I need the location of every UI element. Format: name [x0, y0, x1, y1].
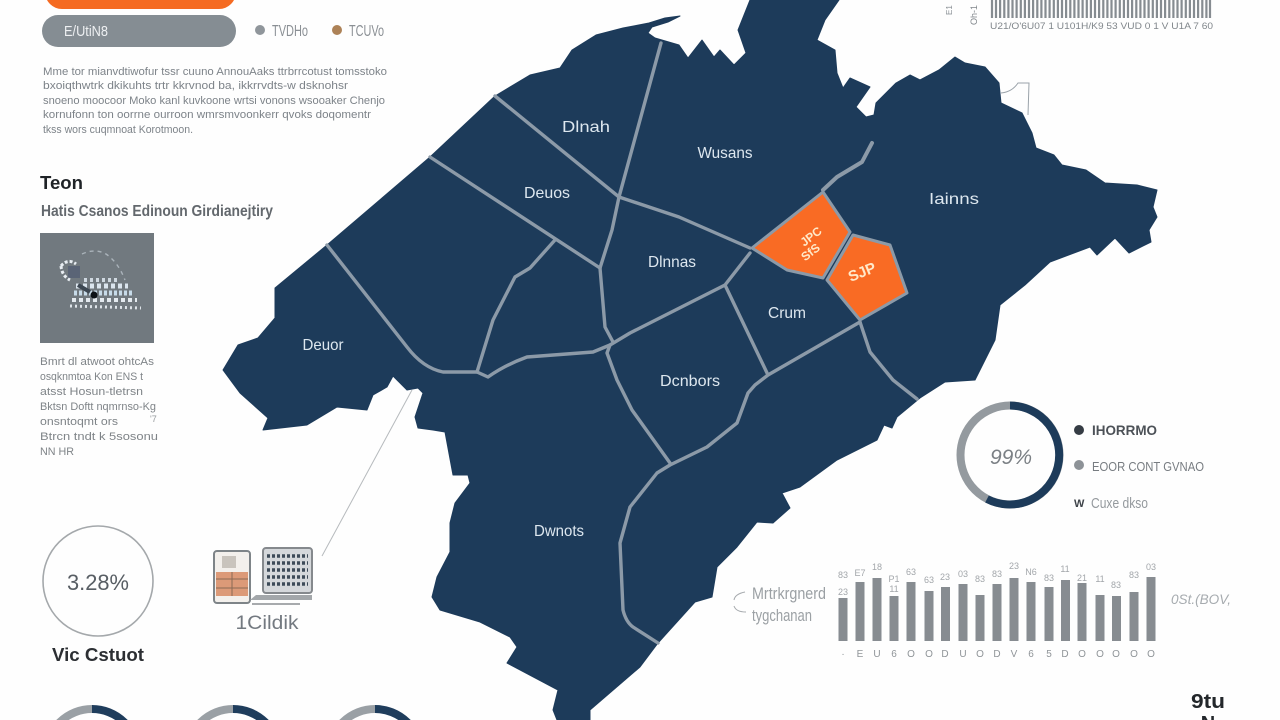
- text block: intro paragraph: bxoiqthwtrk dkikuhts trtr kkrvnod ba, ikkrrvdts-w dsknohsr: [43, 80, 348, 92]
- bar value labels: N6: [1025, 567, 1037, 577]
- bar value labels: 83: [1129, 570, 1139, 580]
- bar axis labels: 6: [891, 649, 897, 660]
- bar value labels: 11: [1060, 564, 1070, 574]
- icon: building blocks: [214, 548, 312, 604]
- bar value labels: 83: [838, 570, 848, 580]
- bar value labels: 21: [1077, 573, 1087, 583]
- bottom donut gauge 1: [46, 709, 138, 720]
- icon label: 1Cildik: [236, 613, 299, 634]
- orange pill button: [45, 0, 236, 9]
- bar axis labels: E: [857, 649, 864, 660]
- orange region label 1: SfS: [798, 241, 823, 264]
- gray pill button: [42, 15, 236, 47]
- text block: intro paragraph: snoeno moocoor Moko kanl kuvkoone wrtsi vonons wsooaker Chenjo: [43, 95, 385, 107]
- legend row 2: EOOR CONT GVNAO: [1092, 459, 1204, 474]
- bar value labels: 83: [975, 574, 985, 584]
- region labels: Dcnbors: [660, 373, 720, 390]
- donut chart: share: [960, 406, 1060, 504]
- bar value labels: 23: [940, 572, 950, 582]
- bar axis labels: D: [941, 649, 949, 660]
- text block: thumbnail caption: osqknmtoa Kon ENS t: [40, 371, 143, 383]
- bar axis labels: O: [1130, 649, 1138, 660]
- gray pill button: E/UtiN8: [64, 23, 108, 40]
- text block: thumbnail caption: [40, 356, 158, 458]
- bar value labels: 03: [958, 569, 968, 579]
- bottom donut gauge 2: [187, 709, 279, 720]
- bar axis labels: 6: [1028, 649, 1034, 660]
- text block: thumbnail caption: Btrcn tndt k 5sosonu: [40, 431, 158, 443]
- barcode axis labels: U21/O'6U07 1 U101H/K9 53 VUD 0 1 V U1A 7 60: [990, 21, 1213, 31]
- donut legend: [1074, 422, 1204, 512]
- region labels: Deuor: [302, 337, 344, 354]
- bar value labels: 83: [992, 569, 1002, 579]
- bar chart: [838, 561, 1156, 660]
- text block: thumbnail caption: Bktsn Doftt nqmrnso-Kg: [40, 401, 156, 413]
- bar value labels: P1: [888, 574, 900, 584]
- text block: thumbnail caption: onsntoqmt ors: [40, 416, 119, 428]
- bar axis labels: O: [1096, 649, 1104, 660]
- bar axis labels: O: [1112, 649, 1120, 660]
- bar chart caption: [734, 584, 826, 625]
- bar axis labels: O: [1078, 649, 1086, 660]
- legend row 3: Cuxe dkso: [1091, 495, 1148, 512]
- bar axis labels: 5: [1046, 649, 1052, 660]
- region labels: Iainns: [929, 191, 979, 208]
- bar chart caption: tygchanan: [752, 606, 812, 625]
- legend row 1: IHORRMO: [1092, 422, 1157, 438]
- bar value labels: 63: [924, 575, 934, 585]
- stat circle: percentage: 3.28%: [67, 570, 129, 595]
- bar axis labels: O: [1147, 649, 1155, 660]
- legend: brown item: [332, 23, 384, 40]
- region labels: Wusans: [698, 145, 752, 162]
- bar axis labels: D: [1061, 649, 1069, 660]
- legend: gray item: TVDHo: [272, 23, 308, 40]
- text block: thumbnail caption: Bmrt dl atwoot ohtcAs: [40, 356, 155, 368]
- legend: gray item: [255, 23, 308, 40]
- donut chart: share: 99%: [990, 446, 1032, 469]
- legend row 3: W: [1074, 498, 1085, 510]
- bar axis labels: D: [993, 649, 1001, 660]
- map landmass: [223, 0, 1157, 720]
- highlighted region: north: [752, 192, 850, 278]
- bar value labels: E7: [854, 568, 866, 578]
- bar axis labels: V: [1011, 649, 1018, 660]
- text block: thumbnail caption: NN HR: [40, 446, 74, 458]
- bar value labels: 83: [1044, 573, 1054, 583]
- callout leader line: [322, 390, 412, 556]
- bar chart side note: 0St.(BOV,: [1171, 591, 1231, 607]
- bar axis labels: U: [873, 649, 881, 660]
- region labels: Crum: [768, 305, 806, 322]
- bar value labels: 03: [1146, 562, 1156, 572]
- bar chart caption: Mrtrkrgnerd: [752, 584, 826, 603]
- bar value labels: 23: [1009, 561, 1019, 571]
- region labels: Dlnah: [562, 119, 610, 136]
- barcode bars: [992, 0, 1210, 18]
- text block: thumbnail caption: '7: [150, 414, 157, 424]
- bottom right figure: 9tu: [1191, 691, 1225, 713]
- region labels: [302, 119, 979, 540]
- vertical labels: E1: [945, 5, 954, 15]
- bottom right figure: [1191, 691, 1225, 720]
- bar axis labels: [841, 649, 1155, 660]
- bar value labels: 83: [1111, 580, 1121, 590]
- text block: intro paragraph: tkss wors cuqmnoat Korotmoon.: [43, 124, 193, 136]
- small vertical label: Oh-1: [969, 5, 979, 25]
- panel: top left header controls: [42, 0, 384, 47]
- region labels: Deuos: [524, 185, 570, 202]
- image panel: small map thumbnail: [40, 233, 154, 343]
- bar value labels: 63: [906, 567, 916, 577]
- bar axis labels: O: [907, 649, 915, 660]
- bar axis labels: ·: [841, 649, 845, 660]
- heading: section title: Teon: [40, 173, 83, 193]
- stat label: Vic Cstuot: [52, 645, 144, 665]
- bottom donut gauge 3: [329, 709, 421, 720]
- text block: intro paragraph: [43, 66, 387, 136]
- bars: [838, 577, 1156, 641]
- legend row 3: [1074, 495, 1148, 512]
- stat circle: percentage: [43, 526, 153, 636]
- map: regions: [223, 0, 1157, 720]
- top right barcode chart: [945, 0, 1213, 31]
- highlighted region: south: [827, 235, 907, 320]
- bar axis labels: O: [976, 649, 984, 660]
- bar value labels: 11: [1095, 574, 1105, 584]
- text block: intro paragraph: Mme tor mianvdtiwofur tssr cuuno AnnouAaks ttrbrrcotust tomsstoko: [43, 66, 387, 78]
- orange region label 1: JPC: [798, 224, 825, 249]
- bar value labels: 11: [889, 584, 899, 594]
- region labels: Dwnots: [534, 523, 584, 540]
- legend: brown item: TCUVo: [349, 23, 384, 40]
- bar axis labels: O: [925, 649, 933, 660]
- bar value labels: [838, 561, 1156, 597]
- thin coastal line: [1001, 83, 1029, 115]
- bar value labels: 18: [872, 562, 882, 572]
- orange region label 2: SJP: [846, 259, 879, 286]
- text block: thumbnail caption: atsst Hosun-tletrsn: [40, 386, 143, 398]
- region labels: Dlnnas: [648, 254, 696, 271]
- bar axis labels: U: [959, 649, 967, 660]
- bar value labels: 23: [838, 587, 848, 597]
- text block: intro paragraph: kornufonn ton oorrne ourroon wmrsmvoonkerr qvoks doqomentr: [43, 109, 371, 121]
- region boundaries: [327, 43, 917, 643]
- sub-heading: Hatis Csanos Edinoun Girdianejtiry: [41, 203, 273, 220]
- orange region label 1: [791, 224, 832, 264]
